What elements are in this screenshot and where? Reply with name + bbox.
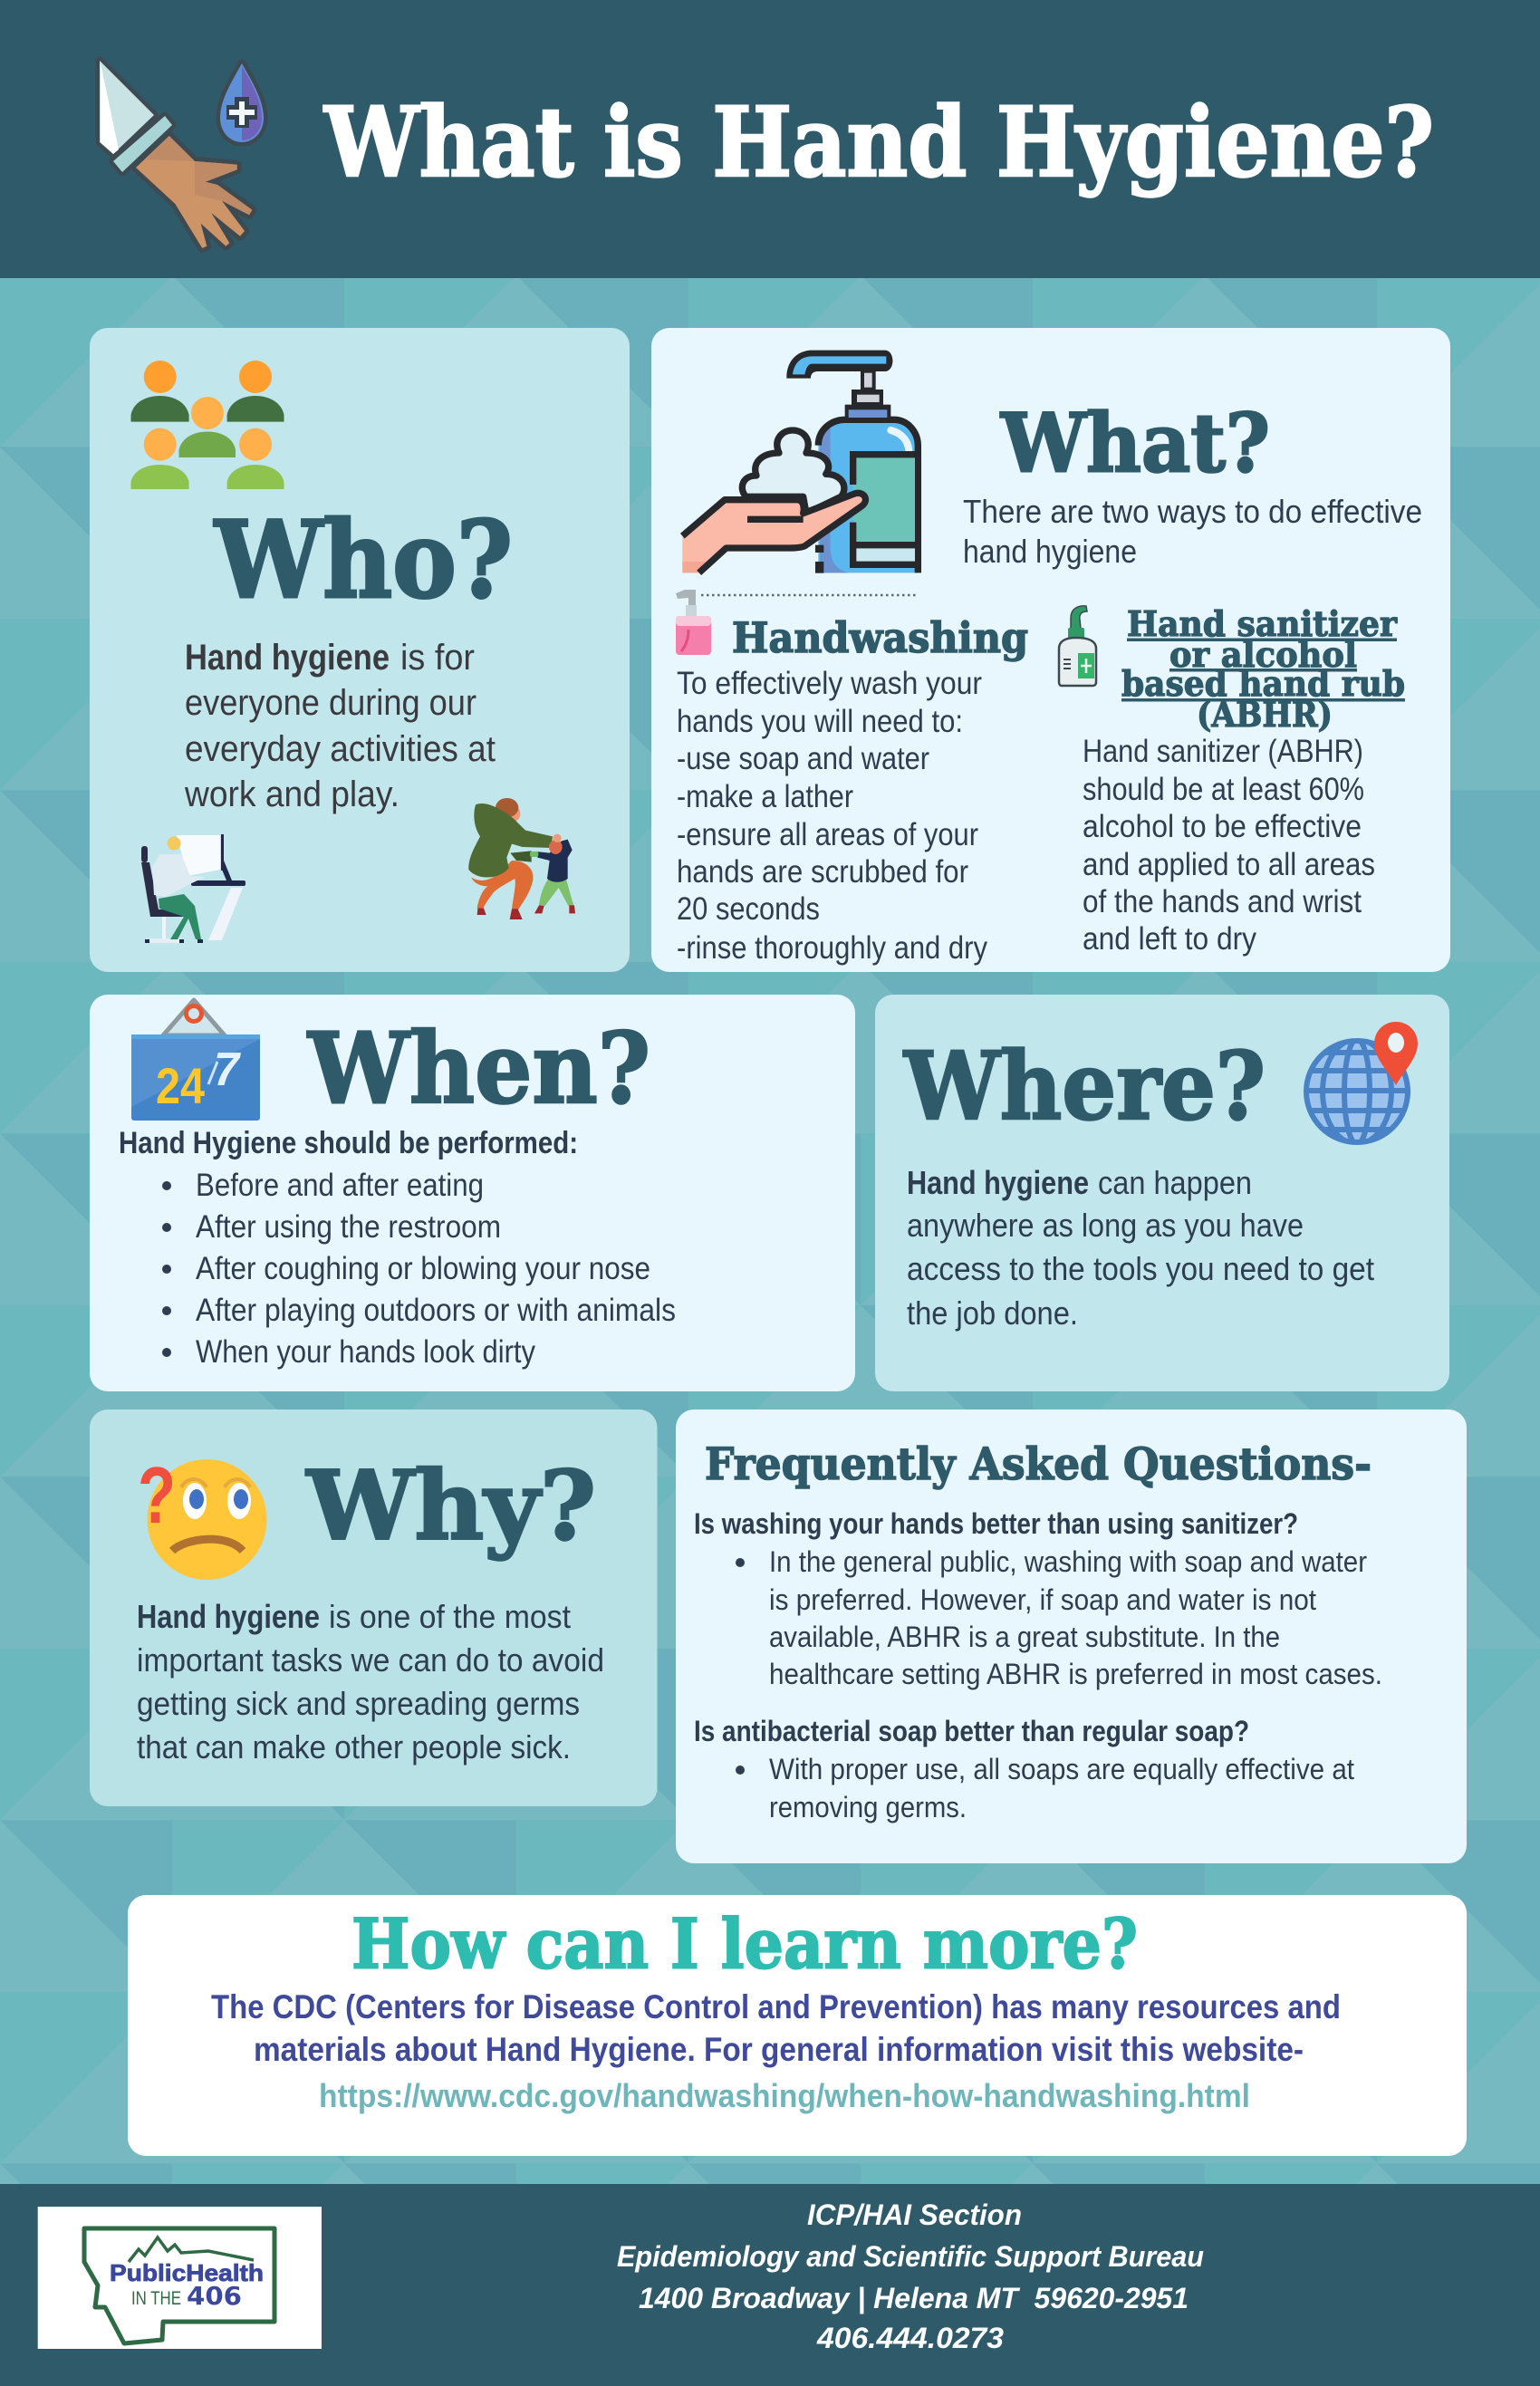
text block: two ways: hand hygiene bbox=[963, 533, 1137, 570]
text block: sanitizer guidance: and left to dry bbox=[1083, 921, 1256, 957]
text block: sanitizer guidance: and applied to all areas bbox=[1083, 847, 1375, 882]
text block: cdc resources: The CDC (Centers for Disease Control and Prevention) has many resources and bbox=[211, 1988, 1341, 2025]
icon: globe with location pin bbox=[1304, 1022, 1418, 1144]
subheading: hand sanitizer: or alcohol bbox=[1169, 634, 1357, 675]
logo: public health in the 406: PublicHealth bbox=[110, 2259, 264, 2286]
list: when to perform hand hygiene: After coughing or blowing your nose bbox=[196, 1251, 650, 1286]
text block: handwashing steps: hands are scrubbed for bbox=[677, 854, 968, 890]
link: cdc website: https://www.cdc.gov/handwashing/when-how-handwashing.html bbox=[319, 2077, 1250, 2114]
list: when to perform hand hygiene: After using the restroom bbox=[196, 1209, 501, 1245]
text block: contact details: ICP/HAI Section bbox=[807, 2198, 1022, 2231]
text block: why: that can make other people sick. bbox=[137, 1728, 571, 1765]
icon: 24/7 calendar: 7 bbox=[214, 1044, 241, 1096]
icon: sanitizer bottle bbox=[1059, 606, 1096, 686]
question 1: available, ABHR is a great substitute. In the bbox=[769, 1621, 1280, 1653]
heading: who: Who? bbox=[213, 497, 513, 622]
panel: frequently asked questions bbox=[676, 1409, 1467, 1863]
icon: 24/7 calendar: 24 bbox=[156, 1057, 205, 1114]
logo: public health in the 406: IN THE bbox=[131, 2288, 181, 2309]
question 1: In the general public, washing with soap and water bbox=[769, 1545, 1367, 1578]
icon: soap dispenser and hand bbox=[682, 351, 918, 573]
text block: sanitizer guidance: alcohol to be effective bbox=[1083, 809, 1362, 844]
text block: two ways: There are two ways to do effective bbox=[963, 493, 1422, 530]
list: when to perform hand hygiene: After playing outdoors or with animals bbox=[196, 1293, 676, 1328]
text block: where: anywhere as long as you have bbox=[907, 1207, 1304, 1244]
question 1 bbox=[694, 1507, 1382, 1690]
text block: who bbox=[184, 638, 496, 814]
text block: who: work and play. bbox=[184, 774, 399, 814]
text block: cdc resources: materials about Hand Hygiene. For general information visit this website- bbox=[254, 2031, 1304, 2068]
text block: handwashing steps bbox=[677, 666, 987, 966]
panel: learn more bbox=[128, 1895, 1467, 2156]
text block: sanitizer guidance: of the hands and wrist bbox=[1083, 884, 1362, 919]
icon: pink soap bottle bbox=[676, 590, 711, 655]
text block: handwashing steps: 20 seconds bbox=[677, 891, 820, 927]
icon: person at computer bbox=[141, 834, 245, 943]
logo: public health in the 406 bbox=[38, 2207, 322, 2349]
question 1: is preferred. However, if soap and water is not bbox=[769, 1583, 1316, 1616]
text block: handwashing steps: -use soap and water bbox=[677, 741, 929, 776]
text block: where: Hand hygiene bbox=[907, 1164, 1089, 1201]
panel: who bbox=[90, 328, 630, 972]
logo: public health in the 406: 406 bbox=[187, 2281, 242, 2311]
header band bbox=[0, 0, 1540, 278]
text block: handwashing steps: To effectively wash your bbox=[677, 666, 982, 701]
text block: handwashing steps: hands you will need to: bbox=[677, 704, 963, 739]
text block: handwashing steps: -rinse thoroughly and dry bbox=[677, 930, 987, 966]
text block: handwashing steps: -make a lather bbox=[677, 779, 853, 814]
text block: why bbox=[137, 1598, 604, 1765]
list: when to perform hand hygiene bbox=[162, 1168, 676, 1370]
subheading: hand sanitizer: based hand rub bbox=[1121, 663, 1405, 704]
text block: contact details: 406.444.0273 bbox=[816, 2322, 1004, 2354]
text block: where: can happen bbox=[1098, 1164, 1252, 1201]
text block: why: important tasks we can do to avoid bbox=[137, 1641, 604, 1679]
text block: contact details: 1400 Broadway | Helena MT 59620-2951 bbox=[639, 2282, 1189, 2314]
text block: when list lead-in: Hand Hygiene should be performed: bbox=[119, 1126, 578, 1160]
question 2: removing germs. bbox=[769, 1791, 967, 1823]
question 2 bbox=[694, 1715, 1354, 1823]
subheading: hand sanitizer: (ABHR) bbox=[1197, 694, 1333, 735]
heading: what: What? bbox=[1000, 395, 1270, 490]
text block: why: Hand hygiene bbox=[137, 1598, 320, 1635]
text block: where: the job done. bbox=[907, 1294, 1078, 1332]
text block: sanitizer guidance bbox=[1083, 734, 1375, 957]
text block: who: everyday activities at bbox=[185, 729, 496, 769]
heading: learn more: How can I learn more? bbox=[351, 1904, 1138, 1984]
icon: confused face bbox=[138, 1450, 266, 1580]
question 2: With proper use, all soaps are equally effective at bbox=[769, 1753, 1354, 1785]
icon: group of people bbox=[130, 361, 284, 489]
text block: contact details bbox=[617, 2198, 1204, 2354]
text block: cdc resources bbox=[211, 1988, 1341, 2068]
heading: where: Where? bbox=[903, 1032, 1266, 1141]
heading: when: When? bbox=[307, 1012, 650, 1126]
text block: where bbox=[907, 1164, 1374, 1332]
panel: what bbox=[651, 328, 1450, 972]
icon: gloved hand and sanitizer drop bbox=[100, 61, 264, 248]
text block: sanitizer guidance: should be at least 60% bbox=[1083, 772, 1364, 807]
text block: sanitizer guidance: Hand sanitizer (ABHR) bbox=[1083, 734, 1363, 769]
icon: confused face: ? bbox=[138, 1450, 176, 1540]
panel: why bbox=[90, 1409, 658, 1806]
panel: where bbox=[875, 995, 1449, 1391]
list: when to perform hand hygiene: When your hands look dirty bbox=[196, 1334, 535, 1370]
text block: handwashing steps: -ensure all areas of your bbox=[677, 817, 978, 852]
subheading: hand sanitizer: Hand sanitizer bbox=[1127, 603, 1398, 644]
footer band bbox=[0, 2184, 1540, 2386]
list: when to perform hand hygiene: Before and after eating bbox=[196, 1168, 484, 1203]
text block: who: is for bbox=[400, 638, 475, 678]
panel: when bbox=[90, 995, 855, 1391]
text block: why: getting sick and spreading germs bbox=[137, 1685, 580, 1722]
text block: contact details: Epidemiology and Scientific Support Bureau bbox=[617, 2240, 1204, 2273]
subheading: handwashing: Handwashing bbox=[732, 613, 1028, 662]
heading: faq: Frequently Asked Questions- bbox=[705, 1438, 1372, 1490]
question 2: Is antibacterial soap better than regular soap? bbox=[694, 1715, 1249, 1747]
text block: where: access to the tools you need to get bbox=[907, 1250, 1374, 1287]
icon: parent and child bbox=[468, 798, 575, 919]
text block: who: everyone during our bbox=[185, 683, 476, 723]
question 1: healthcare setting ABHR is preferred in most cases. bbox=[769, 1658, 1382, 1690]
icon: 24/7 calendar bbox=[131, 1000, 260, 1121]
question 1: Is washing your hands better than using sanitizer? bbox=[694, 1507, 1298, 1540]
text block: who: Hand hygiene bbox=[185, 638, 390, 678]
text block: why: is one of the most bbox=[329, 1598, 571, 1635]
heading: why: Why? bbox=[305, 1449, 596, 1562]
text block: two ways bbox=[963, 493, 1422, 570]
subheading: hand sanitizer bbox=[1121, 603, 1405, 735]
